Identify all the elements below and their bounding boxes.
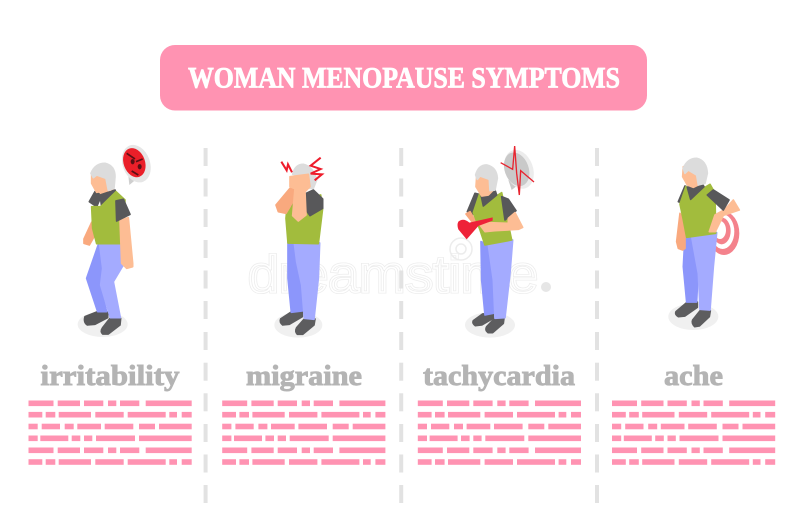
- title banner: [160, 45, 647, 110]
- watermark: dreamstime: [248, 246, 538, 304]
- text block: migraine: [222, 400, 385, 465]
- icon: heart rate speech bubble: [499, 146, 539, 195]
- column dividers: [204, 148, 599, 503]
- icon: pain target: [709, 212, 739, 255]
- figure: ache: [668, 158, 739, 330]
- icon: pain lightning: [281, 158, 322, 180]
- icon: angry face speech bubble: [117, 141, 156, 187]
- heading: migraine: migraine: [246, 360, 362, 392]
- heading: ache: ache: [664, 360, 723, 392]
- text block: irritability: [28, 400, 192, 465]
- figure: irritability: [78, 141, 156, 337]
- heading: irritability: irritability: [40, 360, 180, 392]
- title banner: WOMAN MENOPAUSE SYMPTOMS: [188, 62, 620, 94]
- figure: migraine: [274, 158, 323, 338]
- text block: tachycardia: [418, 400, 581, 465]
- icon: red heart: [457, 217, 493, 239]
- watermark: dreamstime: [248, 246, 538, 304]
- heading: tachycardia: tachycardia: [423, 360, 576, 392]
- text block: ache: [612, 400, 775, 465]
- figure: tachycardia: [457, 146, 539, 338]
